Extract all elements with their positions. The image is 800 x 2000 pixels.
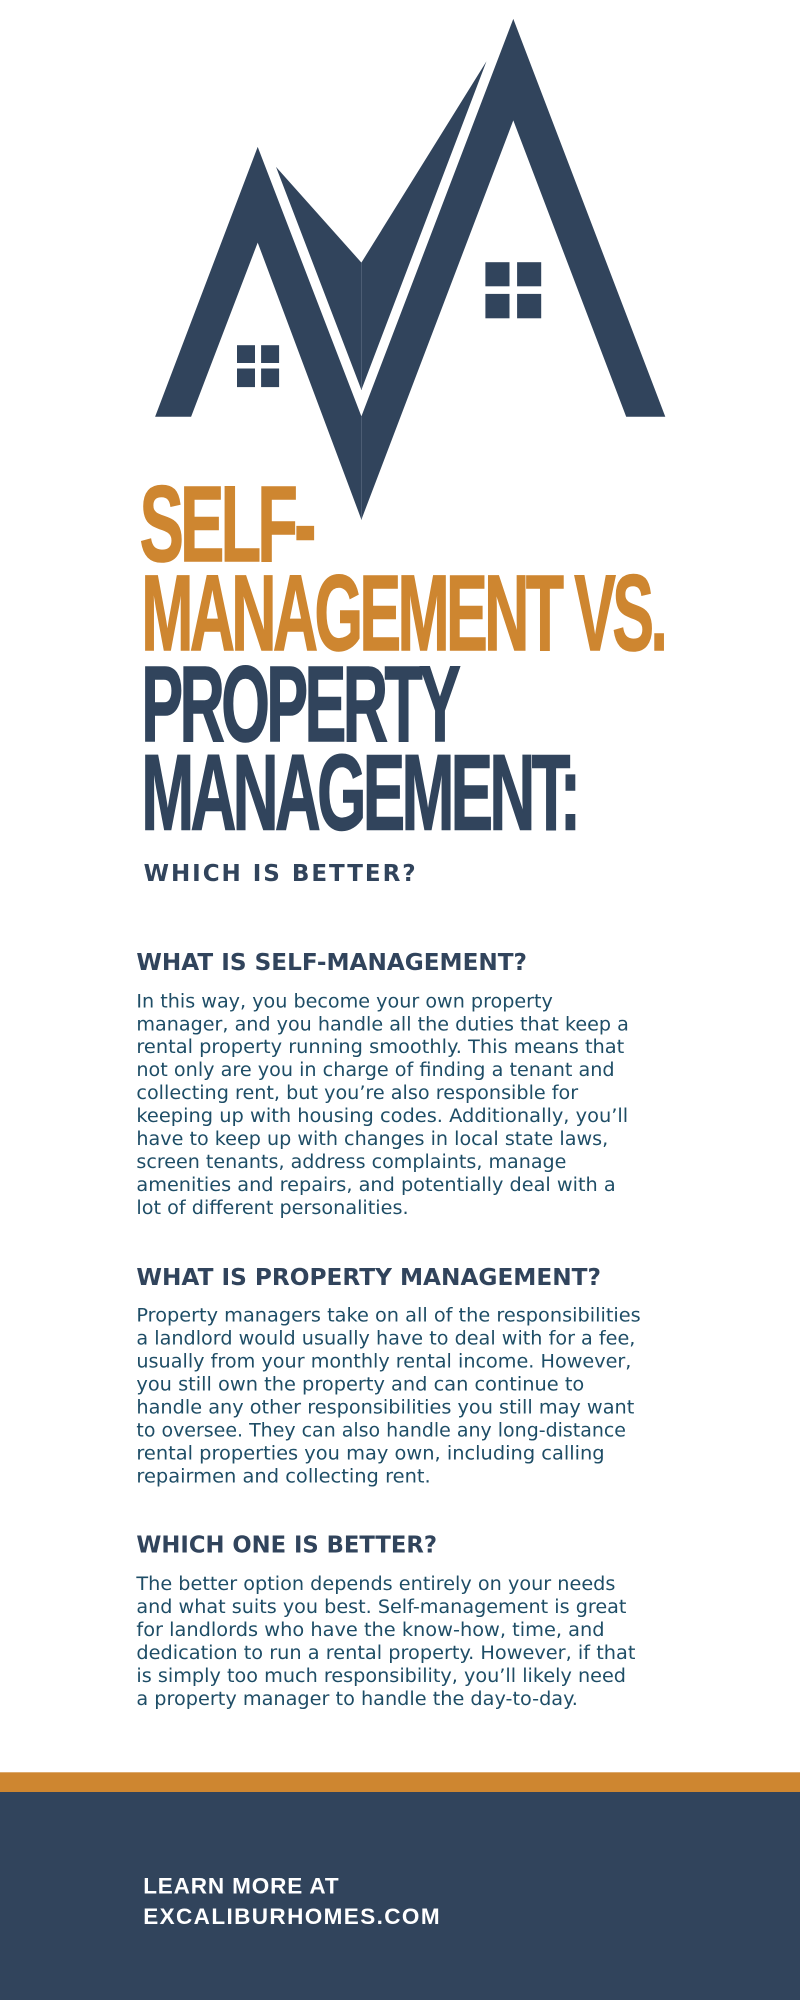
footer call to action: LEARN MORE AT [143,1873,339,1898]
text block: In this way, you become your own property [136,991,553,1012]
title [140,463,664,852]
text block: and what suits you best. Self-management is great [136,1597,626,1618]
text block: handle any other responsibilities you still may want [136,1398,634,1419]
heading: WHAT IS PROPERTY MANAGEMENT? [136,1265,601,1291]
subtitle: WHICH IS BETTER? [144,861,416,887]
footer call to action: EXCALIBURHOMES.COM [143,1904,440,1929]
text block: not only are you in charge of finding a tenant and [136,1060,615,1081]
middle roof piece [276,61,486,390]
text block: to oversee. They can also handle any long-distance [136,1420,626,1442]
heading: WHICH ONE IS BETTER? [136,1532,437,1558]
icon: small window [237,345,279,387]
text block: keeping up with housing codes. Additionally, you’ll [136,1106,628,1127]
panel: footer [0,1792,800,2000]
text block: is simply too much responsibility, you’ll likely need [136,1666,626,1687]
panel: what is property management [136,1265,641,1488]
title: PROPERTY [141,643,460,764]
text block [136,991,629,1219]
left and right roof outline [155,19,665,520]
text block: you still own the property and can continue to [136,1375,584,1396]
icon: large window [485,262,541,318]
text block: have to keep up with changes in local state laws, [136,1129,608,1150]
text block: rental property running smoothly. This means that [136,1037,624,1058]
icon: twin-roof house logo [155,19,665,520]
text block: Property managers take on all of the responsibilities [136,1306,641,1327]
text block: repairmen and collecting rent. [136,1466,431,1488]
text block: manager, and you handle all the duties that keep a [136,1014,629,1035]
text block: collecting rent, but you’re also responsible for [136,1083,579,1104]
text block: for landlords who have the know-how, time, and [136,1620,605,1641]
text block: usually from your monthly rental income. However, [136,1352,631,1373]
text block: a landlord would usually have to deal with for a fee, [136,1329,635,1350]
panel: what is self-management [136,950,629,1219]
text block: rental properties you may own, including calling [136,1444,605,1464]
text block: a property manager to handle the day-to-day. [136,1689,578,1710]
text block: The better option depends entirely on your needs [135,1574,615,1595]
text block: lot of different personalities. [136,1198,409,1219]
text block: dedication to run a rental property. However, if that [136,1643,635,1664]
text block: screen tenants, address complaints, manage [136,1152,566,1173]
text block [136,1306,641,1488]
panel: which one is better [135,1532,635,1710]
footer call to action [143,1873,440,1929]
text block: amenities and repairs, and potentially deal with a [136,1175,616,1196]
heading: WHAT IS SELF-MANAGEMENT? [136,950,527,976]
footer accent bar [0,1772,800,1792]
title: SELF- [140,463,314,584]
text block [135,1574,635,1710]
